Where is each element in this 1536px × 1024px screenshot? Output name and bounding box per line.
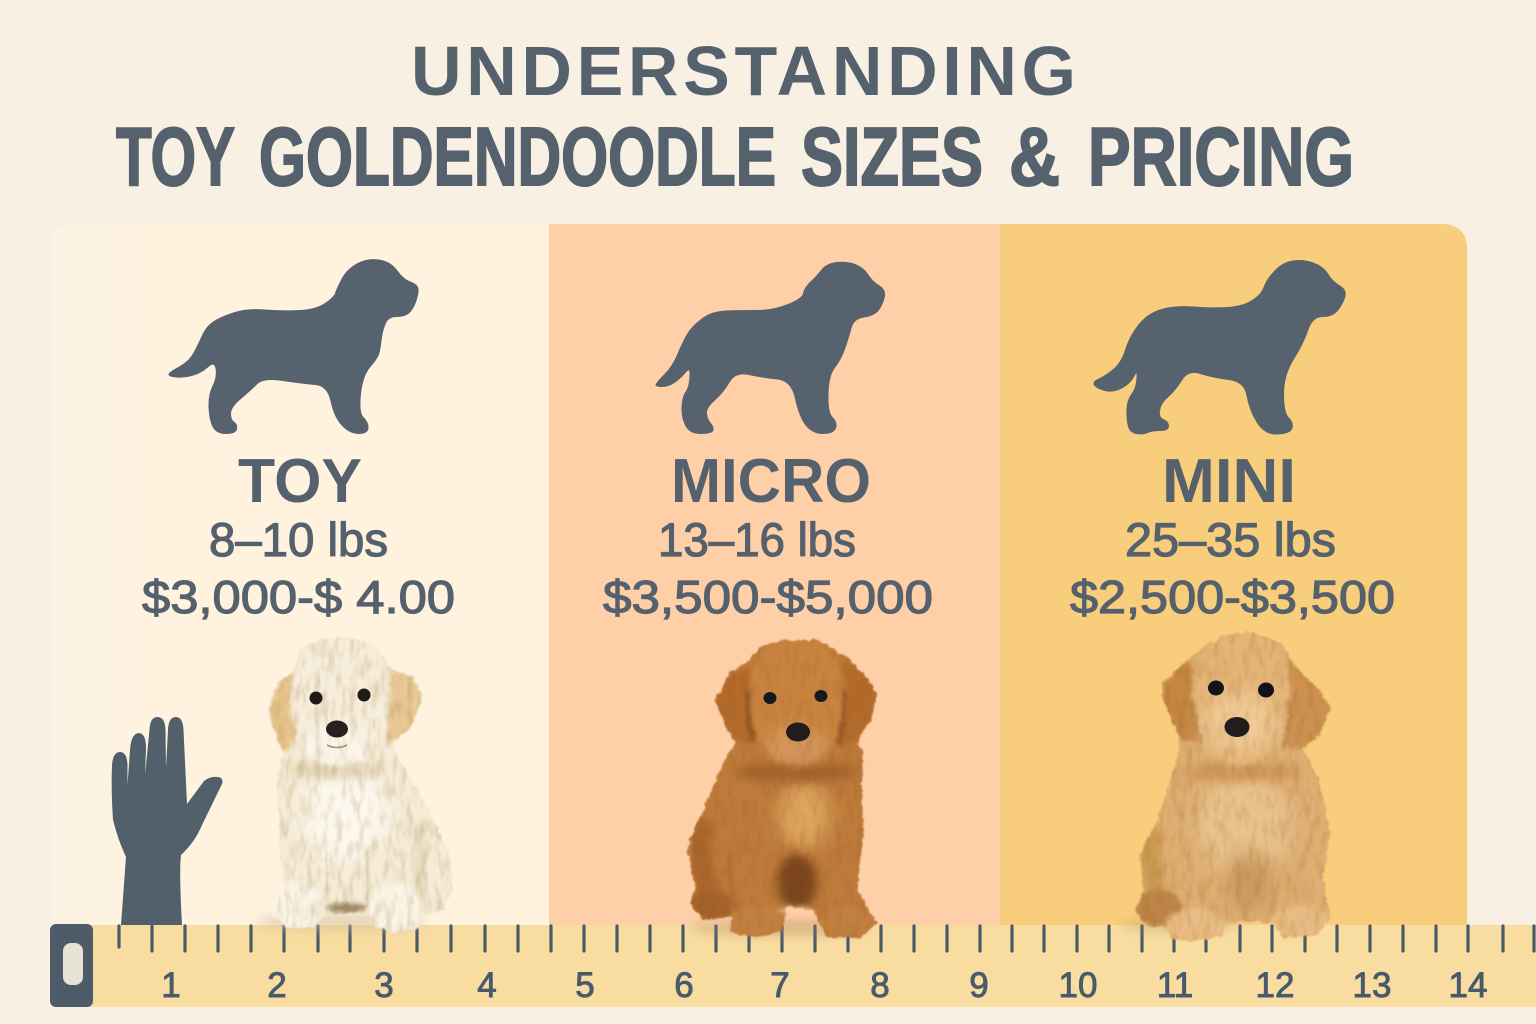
- title line 2: PRICING: [1088, 110, 1354, 203]
- icon: toy dog silhouette: [169, 260, 418, 433]
- ruler numbers: [161, 966, 1487, 1005]
- ruler: [50, 924, 1536, 1007]
- panel: mini background: [1000, 224, 1467, 925]
- photo: toy cream puppy: [255, 630, 460, 940]
- ruler numbers: 9: [969, 966, 989, 1005]
- ruler numbers: 12: [1256, 966, 1294, 1005]
- ruler numbers: 5: [575, 966, 595, 1005]
- text block: mini: [1070, 447, 1395, 623]
- panel: toy background: [50, 224, 549, 925]
- toy heading: TOY: [238, 447, 362, 516]
- text block: toy: [142, 447, 455, 623]
- ruler numbers: 10: [1059, 966, 1097, 1005]
- ruler numbers: 6: [674, 966, 694, 1005]
- micro heading: MICRO: [671, 447, 871, 516]
- ruler numbers: 8: [870, 966, 890, 1005]
- ruler numbers: 7: [770, 966, 790, 1005]
- icon: micro dog silhouette: [656, 263, 884, 433]
- ruler tape: [80, 925, 1536, 1007]
- ruler numbers: 4: [477, 966, 497, 1005]
- ruler numbers: 13: [1353, 966, 1391, 1005]
- ruler numbers: 3: [374, 966, 394, 1005]
- icon: hand size comparison: [112, 717, 222, 925]
- panel: micro background: [549, 224, 1000, 925]
- photo: mini golden puppy: [1120, 625, 1340, 945]
- mini weight: 25–35 lbs: [1125, 513, 1336, 566]
- micro weight: 13–16 lbs: [658, 513, 856, 566]
- ruler tick marks: [119, 926, 1534, 951]
- ruler cap hole: [63, 943, 83, 985]
- title line 2: [116, 110, 1354, 203]
- ruler numbers: 11: [1157, 966, 1193, 1005]
- photo: micro red puppy: [680, 630, 885, 945]
- toy weight: 8–10 lbs: [209, 513, 388, 566]
- toy price: $3,000-$ 4.00: [142, 571, 455, 623]
- micro price: $3,500-$5,000: [603, 571, 933, 623]
- ruler end cap: [50, 924, 93, 1007]
- title line 2: TOY: [116, 110, 235, 203]
- title line 2: GOLDENDOODLE: [259, 110, 776, 203]
- title line 2: &: [1009, 110, 1060, 203]
- title line 1: UNDERSTANDING: [411, 32, 1076, 110]
- mini price: $2,500-$3,500: [1070, 571, 1395, 623]
- text block: micro: [603, 447, 933, 623]
- icon: mini dog silhouette: [1094, 261, 1345, 434]
- title: [116, 32, 1354, 203]
- mini heading: MINI: [1162, 447, 1296, 516]
- ruler numbers: 2: [267, 966, 287, 1005]
- ruler numbers: 1: [161, 966, 181, 1005]
- title line 2: SIZES: [801, 110, 983, 203]
- ruler numbers: 14: [1449, 966, 1487, 1005]
